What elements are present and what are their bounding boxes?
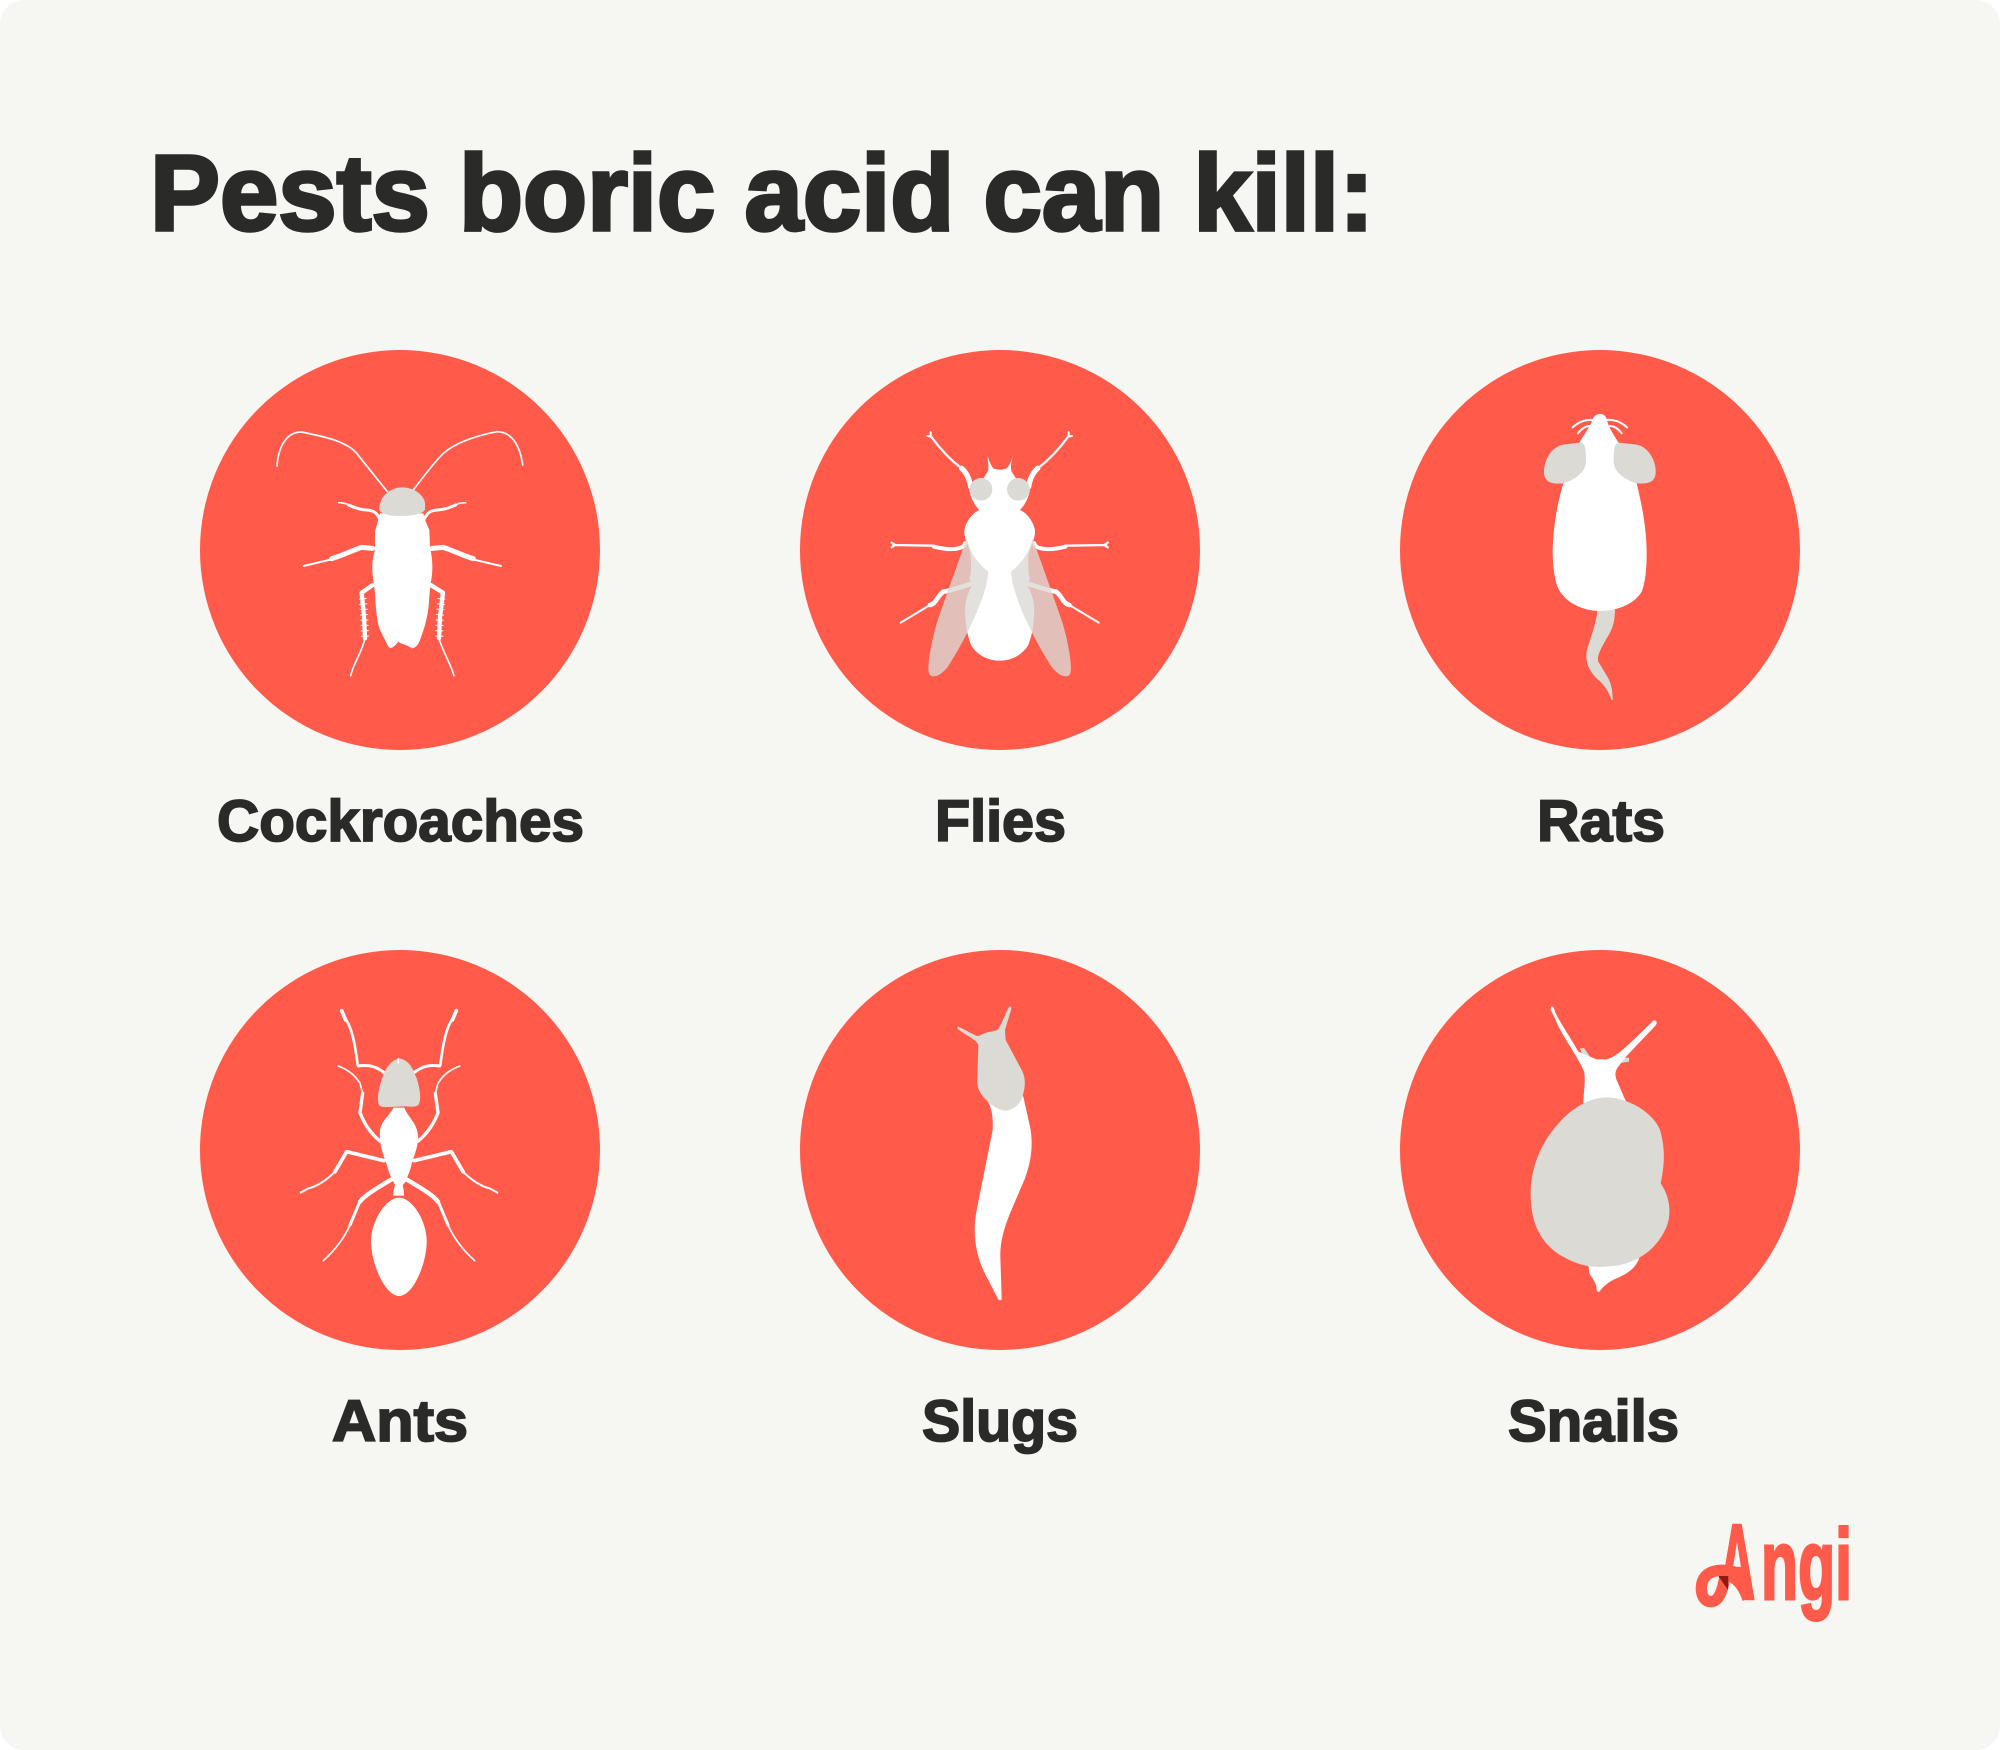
wings [928, 538, 988, 676]
icon: fly [892, 432, 1108, 676]
icon: snail [1531, 1007, 1669, 1292]
panel: slugs [800, 950, 1200, 1350]
circle: flies [800, 350, 1200, 750]
label: snails: Snails [1508, 1389, 1679, 1454]
circle: ants [200, 950, 600, 1350]
label: flies: Flies [935, 789, 1066, 854]
icon: cockroach [277, 432, 523, 676]
icon: ant [301, 1011, 497, 1296]
panel: rats [1400, 350, 1800, 750]
label: rats: Rats [1537, 789, 1665, 854]
title: Pests boric acid can kill: [150, 132, 1374, 253]
logo: Angi: A [1719, 1502, 1755, 1622]
label: cockroaches: Cockroaches [217, 789, 584, 854]
icon: rat [1544, 414, 1656, 700]
circle: cockroaches [200, 350, 600, 750]
circle: slugs [800, 950, 1200, 1350]
icon: slug [957, 1006, 1032, 1300]
panel: snails [1400, 950, 1800, 1350]
circle: rats [1400, 350, 1800, 750]
logo: Angi [1701, 1502, 1852, 1622]
label: slugs: Slugs [922, 1389, 1078, 1454]
label: ants: Ants [332, 1389, 468, 1454]
circle: snails [1400, 950, 1800, 1350]
panel: cockroaches [200, 350, 600, 750]
panel: ants [200, 950, 600, 1350]
panel: flies [800, 350, 1200, 750]
logo: Angi: ngi [1761, 1509, 1852, 1621]
